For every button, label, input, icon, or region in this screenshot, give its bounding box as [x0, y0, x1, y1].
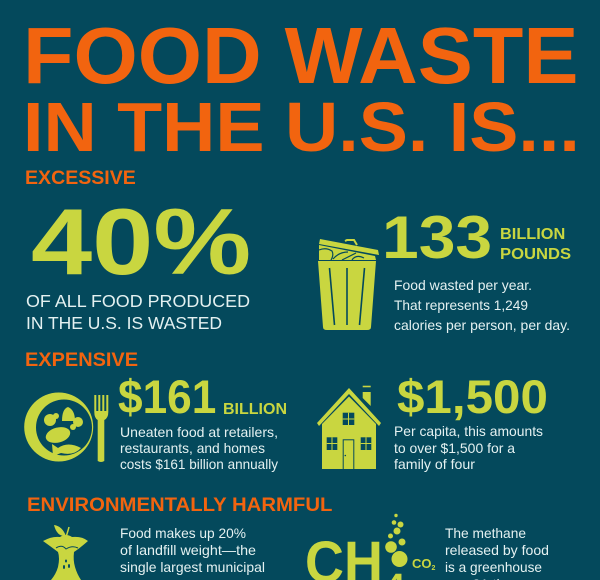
text: landfill weight: single largest municipal [120, 559, 265, 575]
stat: 1500 per capita: to over $1,500 for a [394, 440, 515, 456]
stat: 1500 per capita: $1,500 [397, 371, 548, 424]
title [23, 11, 580, 167]
heading: environmentally harmful: ENVIRONMENTALLY HARMFUL [27, 495, 332, 516]
heading: excessive: EXCESSIVE [25, 168, 136, 189]
stat: 161 billion: costs $161 billion annually [120, 456, 278, 472]
text: landfill weight: Food makes up 20% [120, 525, 246, 541]
stat: 1500 per capita: family of four [394, 456, 475, 472]
stat: 1500 per capita: Per capita, this amounts [394, 423, 543, 439]
icon: methane formula with bubbles: CO [412, 556, 432, 571]
stat: 133 billion pounds: POUNDS [500, 245, 571, 263]
heading: expensive: EXPENSIVE [25, 349, 138, 371]
stat: 133 billion pounds: 133 [382, 205, 492, 271]
stat: 161 billion: BILLION [223, 401, 287, 418]
title: FOOD WASTE [23, 11, 579, 101]
stat: 161 billion: restaurants, and homes [120, 440, 265, 456]
stat: 40 percent: OF ALL FOOD PRODUCED [26, 291, 250, 311]
stat: 40 percent: IN THE U.S. IS WASTED [26, 313, 222, 333]
stat: 1500 per capita [394, 371, 548, 472]
stat: 161 billion: Uneaten food at retailers, [120, 424, 278, 440]
text: methane greenhouse gas: is a greenhouse [445, 559, 542, 575]
stat: 161 billion: $161 [118, 371, 216, 423]
stat: 133 billion pounds: calories per person, per day. [394, 317, 570, 333]
stat: 161 billion [118, 371, 287, 472]
text: landfill weight: of landfill weight—the [120, 542, 256, 558]
stat: 40 percent: 40% [31, 189, 251, 294]
icon: apple core [43, 525, 88, 580]
icon: house [317, 386, 381, 469]
stat: 133 billion pounds: Food wasted per year. [394, 277, 532, 293]
stat: 133 billion pounds: BILLION [500, 225, 565, 243]
icon: methane formula with bubbles [305, 514, 436, 580]
text: methane greenhouse gas [445, 525, 549, 580]
icon: methane formula with bubbles: 2 [432, 565, 436, 572]
title: IN THE U.S. IS... [23, 89, 580, 167]
text: methane greenhouse gas: released by food [445, 542, 549, 558]
stat: 133 billion pounds [382, 205, 571, 333]
icon: trash can [318, 239, 379, 330]
icon: plate with food and fork [24, 392, 108, 462]
text: landfill weight [120, 525, 265, 575]
text: methane greenhouse gas: The methane [445, 525, 526, 541]
stat: 133 billion pounds: That represents 1,249 [394, 297, 528, 313]
